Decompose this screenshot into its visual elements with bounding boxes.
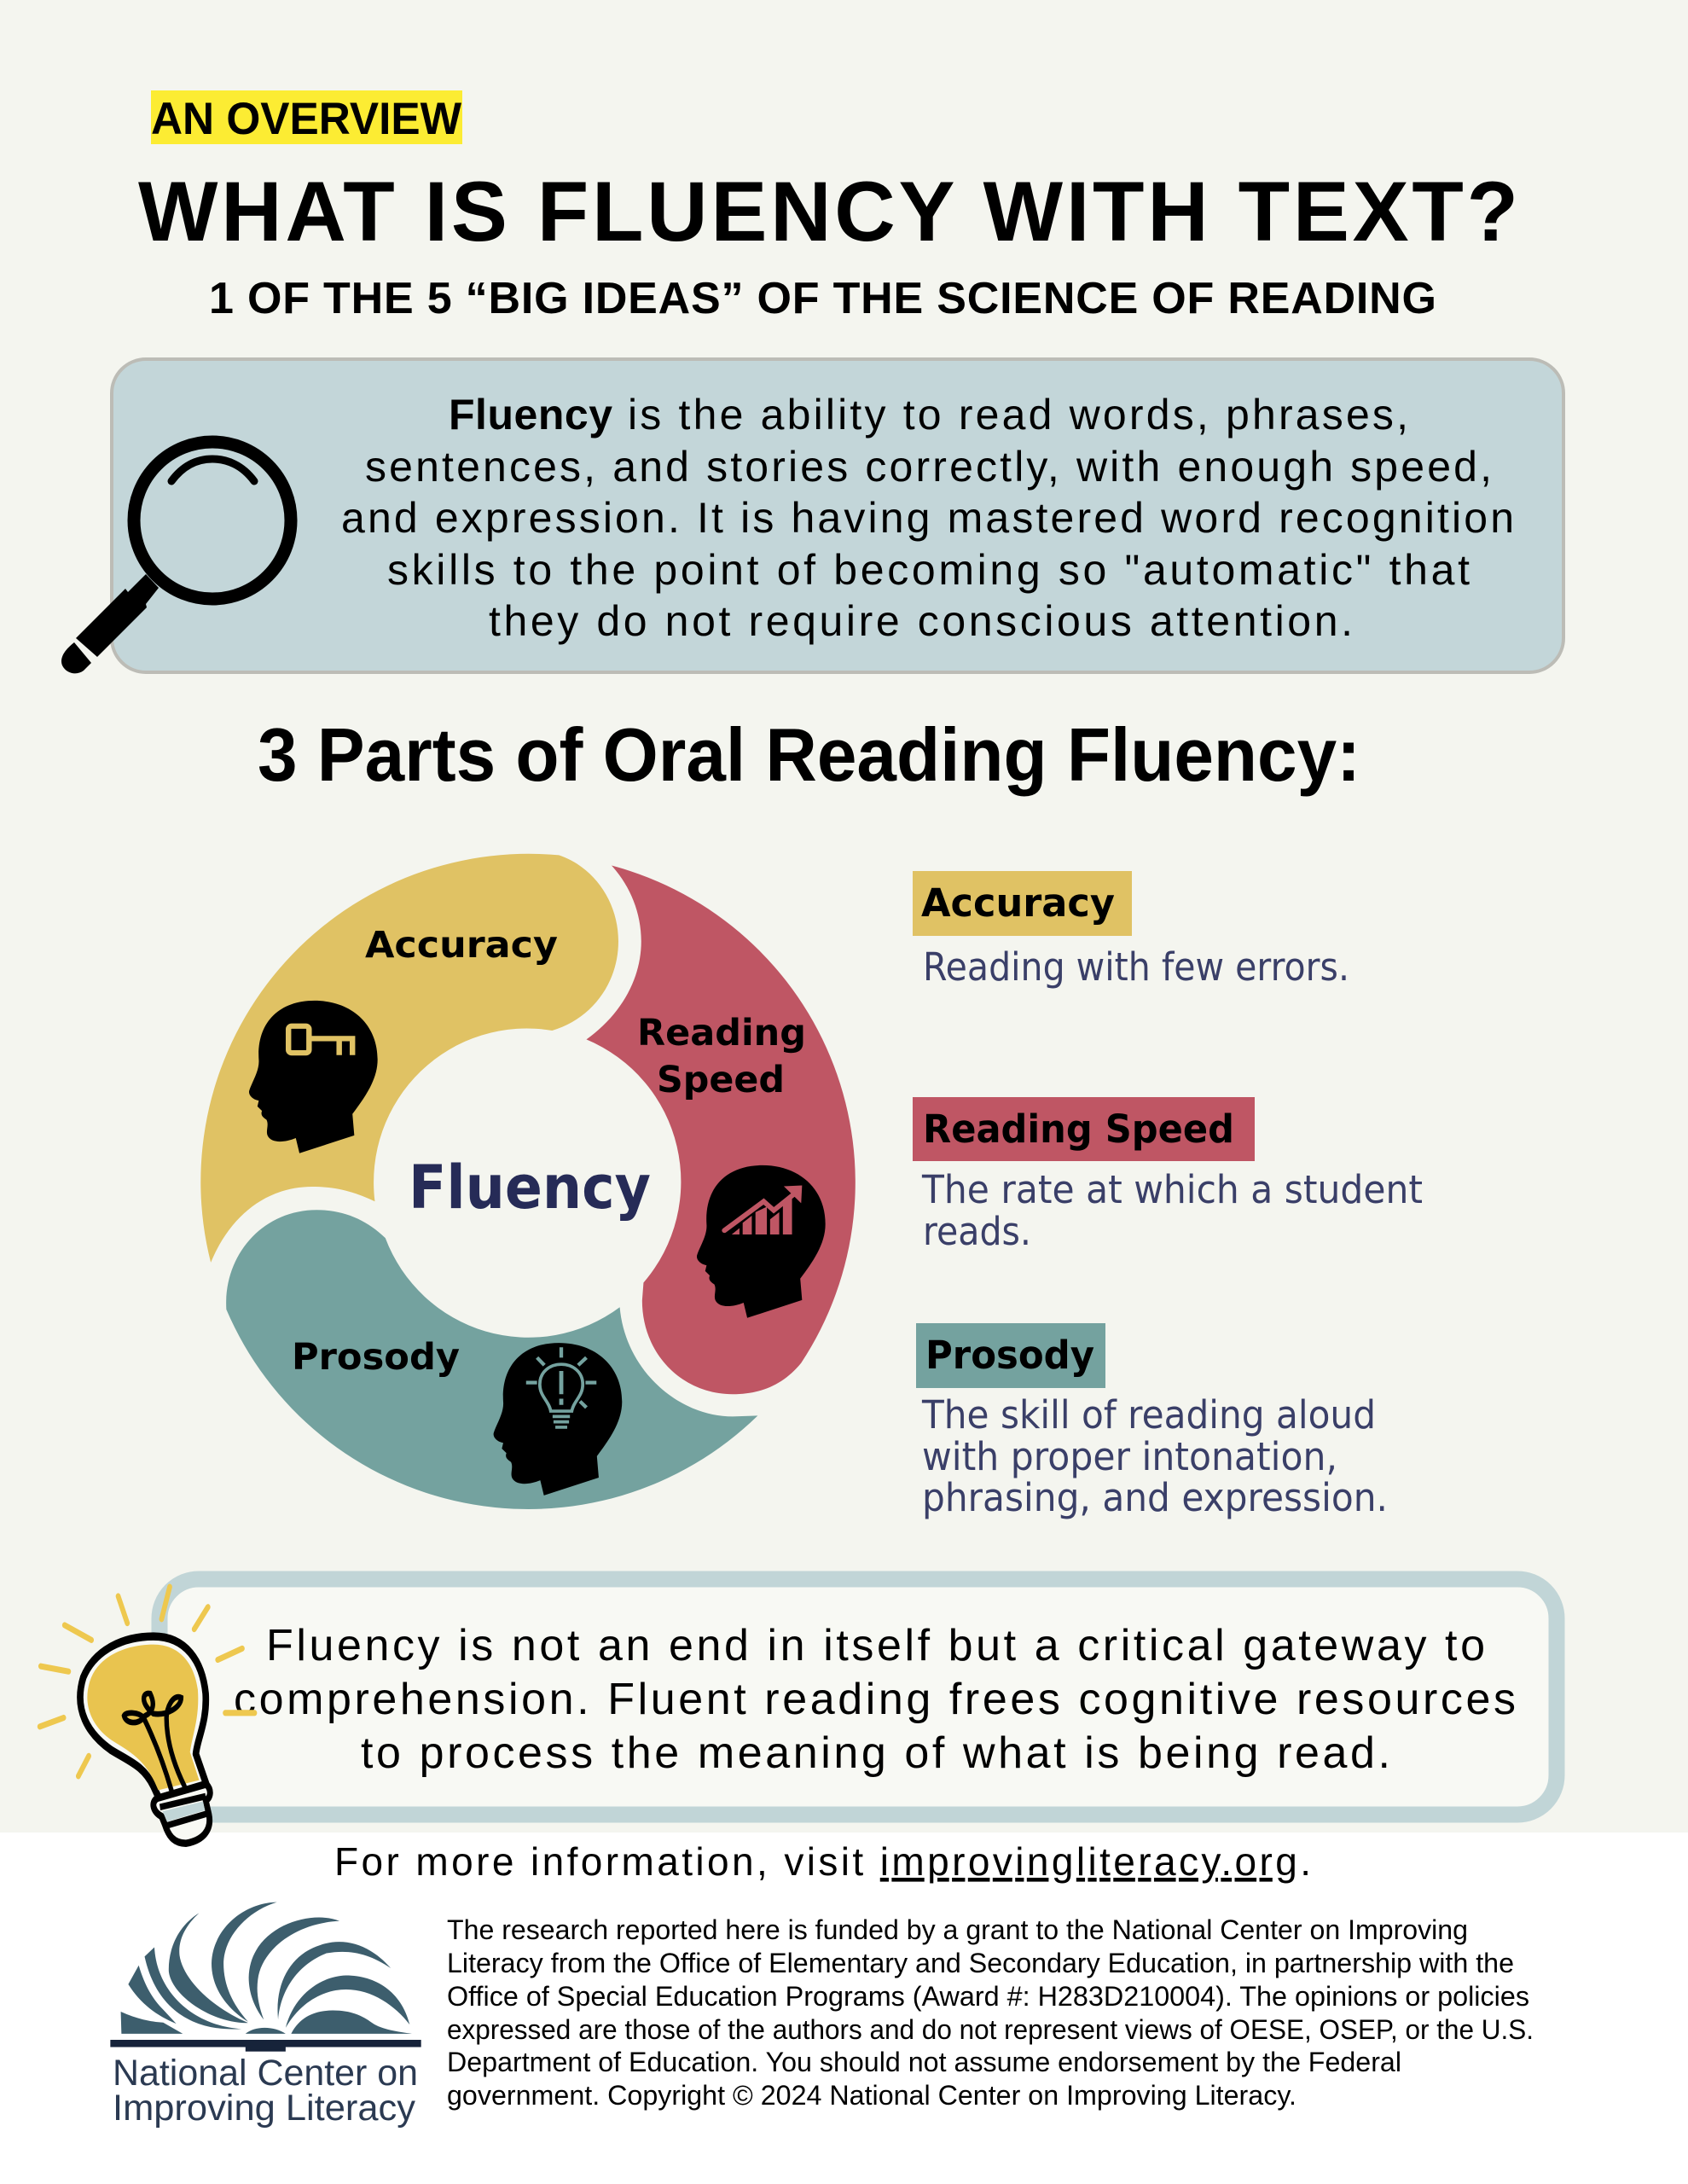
definition text: and expression. It is having mastered word recognition (341, 494, 1514, 542)
legend: accuracy: Reading with few errors. (923, 944, 1349, 990)
funding disclaimer: Office of Special Education Programs (Award #: H283D210004). The opinions or policies (447, 1981, 1529, 2012)
icon: magnifying glass (61, 442, 291, 673)
logo: national center on improving literacy (110, 1902, 421, 2129)
logo: national center on improving literacy: Improving Literacy (113, 2088, 415, 2129)
section heading: 3 Parts of Oral Reading Fluency: (258, 712, 1360, 797)
icon: head with light bulb (494, 1343, 622, 1496)
callout text: Fluency is not an end in itself but a critical gateway to (266, 1621, 1485, 1670)
segment: reading speed (586, 865, 856, 1394)
label: accuracy: Accuracy (365, 924, 558, 967)
callout: gateway to comprehension (160, 1579, 1557, 1815)
icon: head with growth chart (697, 1165, 826, 1318)
funding disclaimer: government. Copyright © 2024 National Center on Improving Literacy. (447, 2080, 1296, 2111)
panel: definition of fluency (112, 359, 1563, 672)
legend: reading speed: Reading Speed (923, 1107, 1234, 1152)
legend: reading speed (913, 1097, 1423, 1254)
callout text: to process the meaning of what is being read. (361, 1728, 1390, 1778)
definition text: is the ability to read words, phrases, (628, 391, 1408, 439)
label: reading speed (637, 1012, 806, 1101)
legend: accuracy (913, 871, 1349, 990)
definition text: Fluency (449, 391, 612, 439)
legend: reading speed: reads. (923, 1209, 1031, 1254)
segment: prosody (226, 1210, 757, 1509)
funding disclaimer: The research reported here is funded by a grant to the National Center on Improving (447, 1914, 1468, 1945)
definition text: they do not require conscious attention. (489, 597, 1353, 645)
legend: prosody: The skill of reading aloud (921, 1392, 1376, 1438)
chart: fluency cycle wheel (200, 854, 856, 1509)
title: WHAT IS FLUENCY WITH TEXT? (138, 164, 1518, 258)
legend: prosody: Prosody (925, 1333, 1094, 1378)
legend: accuracy: Accuracy (921, 880, 1115, 926)
label: reading speed: Reading (637, 1012, 806, 1054)
funding disclaimer: Department of Education. You should not assume endorsement by the Federal (447, 2047, 1401, 2077)
icon: head with key (249, 1001, 378, 1153)
logo: national center on improving literacy: National Center on (113, 2053, 418, 2094)
label: fluency centre: Fluency (409, 1153, 651, 1223)
label: reading speed: Speed (657, 1059, 785, 1101)
definition text (341, 391, 1514, 645)
funding disclaimer (447, 1914, 1534, 2111)
legend: prosody: with proper intonation, (922, 1434, 1337, 1479)
definition text: skills to the point of becoming so "automatic" that (387, 546, 1470, 594)
funding disclaimer: Literacy from the Office of Elementary and Secondary Education, in partnership with the (447, 1948, 1514, 1978)
eyebrow: an overview: AN OVERVIEW (151, 94, 461, 144)
footer link line: For more information, visit improvingliteracy.org. (334, 1839, 1311, 1884)
legend: prosody: phrasing, and expression. (922, 1475, 1388, 1520)
legend: prosody (916, 1323, 1388, 1520)
label: prosody: Prosody (292, 1336, 460, 1379)
definition text: sentences, and stories correctly, with enough speed, (365, 443, 1492, 491)
callout text (234, 1621, 1516, 1778)
funding disclaimer: expressed are those of the authors and do not represent views of OESE, OSEP, or the U.S. (447, 2014, 1534, 2045)
legend: reading speed: The rate at which a student (921, 1167, 1423, 1212)
callout text: comprehension. Fluent reading frees cognitive resources (234, 1675, 1516, 1724)
segment: accuracy (200, 854, 618, 1263)
icon: light bulb (40, 1587, 255, 1844)
subtitle: 1 OF THE 5 “BIG IDEAS” OF THE SCIENCE OF READING (209, 274, 1436, 323)
